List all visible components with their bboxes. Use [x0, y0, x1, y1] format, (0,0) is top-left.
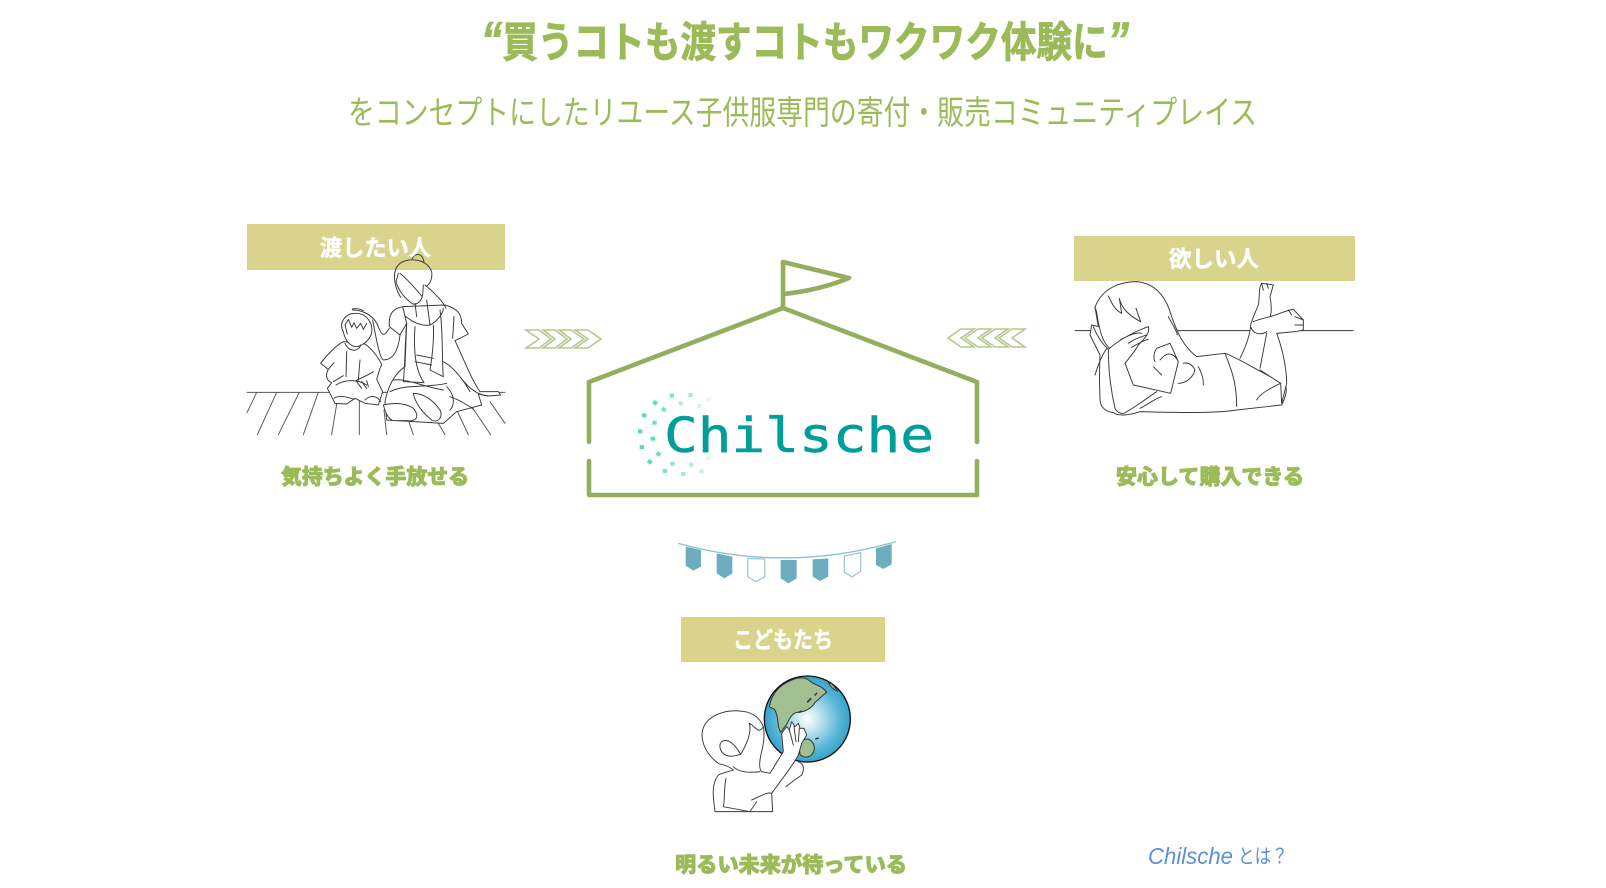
- house tent with flag: [589, 262, 977, 495]
- logo: Chilsche: [638, 393, 934, 476]
- girl: [1090, 282, 1303, 415]
- caption: children: 明るい未来が待っている: [675, 853, 907, 877]
- title: “買うコトも渡すコトもワクワク体験に”: [481, 12, 1129, 68]
- banner text: buyer: 欲しい人: [1169, 247, 1259, 272]
- illustration: mother and child sitting on deck: [247, 254, 505, 435]
- arrows: giver to house: [526, 330, 601, 348]
- banner text: giver: 渡したい人: [320, 236, 431, 261]
- logo wordmark: Chilsche: [664, 408, 934, 464]
- link: what is Chilsche: Chilsche: [1148, 843, 1233, 869]
- link: what is Chilsche: とは？: [1238, 846, 1288, 868]
- bunting flags: [678, 542, 896, 583]
- illustration: girl lying on floor: [1075, 282, 1353, 415]
- link: what is Chilsche: [1148, 843, 1288, 869]
- child: [321, 313, 383, 405]
- subtitle: をコンセプトにしたリユース子供服専門の寄付・販売コミュニティプレイス: [348, 94, 1257, 131]
- logo dots: [638, 393, 711, 476]
- illustration: child holding globe: [702, 676, 850, 812]
- banner: children background: [681, 617, 885, 662]
- caption: giver: 気持ちよく手放せる: [281, 465, 469, 489]
- caption: buyer: 安心して購入できる: [1116, 466, 1304, 489]
- banner: giver background: [247, 224, 505, 270]
- mother: [352, 254, 501, 423]
- arrows: buyer to house: [948, 329, 1025, 347]
- banner text: children: こどもたち: [733, 628, 833, 653]
- child: [702, 711, 807, 812]
- globe: [764, 676, 850, 762]
- floor line: [1075, 329, 1353, 332]
- banner: buyer background: [1074, 236, 1355, 281]
- deck floor: [247, 392, 505, 435]
